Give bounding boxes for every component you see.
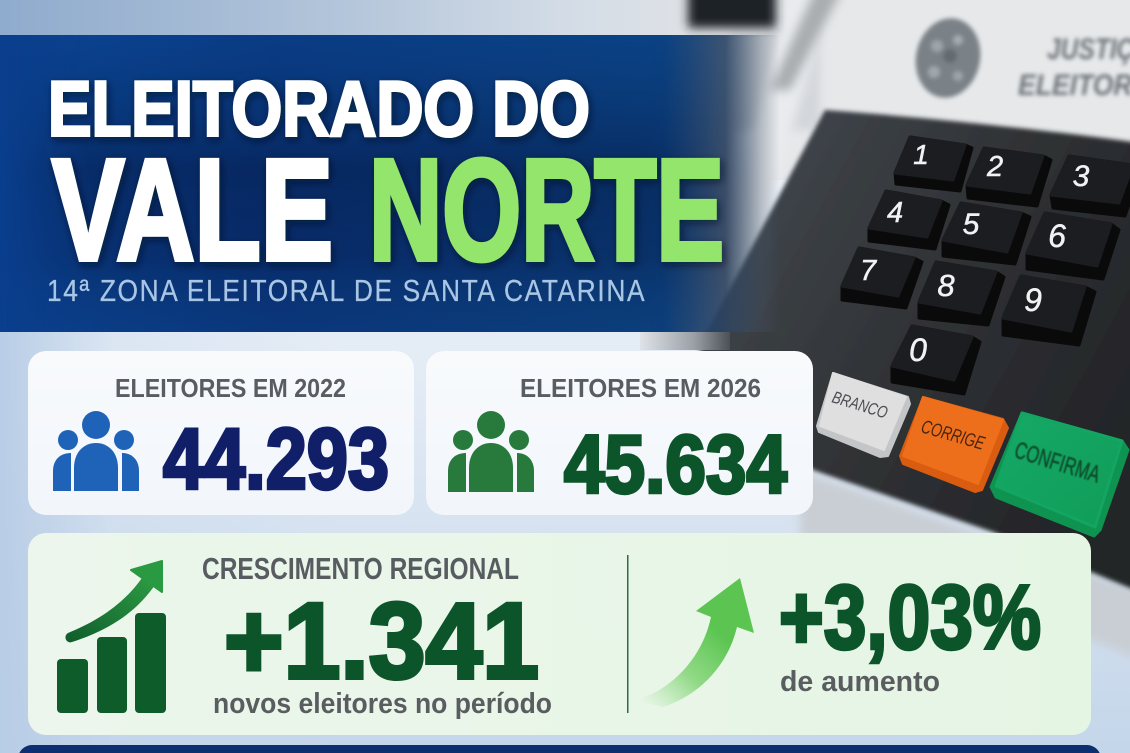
machine keypad body	[698, 110, 1130, 592]
panel: crescimento regional	[28, 533, 1091, 735]
icon: people blue	[53, 411, 139, 491]
emblem	[908, 12, 988, 104]
key 8	[919, 262, 1004, 325]
label 2026: ELEITORES EM 2026	[520, 373, 761, 403]
value 2022: 44.293	[163, 412, 389, 508]
value percent: +3,03%	[779, 568, 1041, 668]
key 3: 3	[1073, 160, 1090, 193]
title banner	[0, 35, 780, 350]
white surface below machine	[800, 470, 1130, 660]
button: corrige	[900, 397, 1008, 492]
key 6	[1027, 213, 1119, 279]
divider	[627, 555, 628, 713]
panel: eleitores 2026	[426, 351, 813, 515]
key 6: 6	[1048, 218, 1066, 254]
button: corrige: CORRIGE	[919, 417, 987, 455]
key 9	[1003, 276, 1095, 345]
bottom bar	[18, 745, 1101, 753]
key 5: 5	[963, 208, 980, 241]
label 2022: ELEITORES EM 2022	[115, 373, 346, 403]
key 4: 4	[887, 197, 903, 229]
casing label	[1018, 33, 1130, 102]
key 2: 2	[986, 151, 1003, 183]
key 1: 1	[913, 139, 929, 170]
title line 2: vale: VALE	[52, 130, 333, 290]
icon: growth chart	[57, 561, 166, 713]
machine upper casing	[688, 0, 1130, 340]
key 1	[895, 137, 972, 191]
subtitle: 14ª ZONA ELEITORAL DE SANTA CATARINA	[47, 274, 645, 309]
key 4	[869, 191, 949, 249]
caption aumento: de aumento	[780, 666, 940, 698]
key 9: 9	[1024, 282, 1042, 318]
icon: big arrow	[637, 578, 754, 707]
title line 2: norte: NORTE	[369, 130, 724, 290]
button: confirma	[991, 413, 1128, 536]
key 3	[1051, 156, 1130, 216]
photo: voting machine	[688, 0, 1130, 660]
value 2026: 45.634	[564, 418, 787, 510]
panel: eleitores 2022	[28, 351, 414, 515]
key 0: 0	[909, 332, 927, 368]
value +1.341: +1.341	[224, 580, 539, 701]
key 7: 7	[860, 255, 878, 287]
key 5	[943, 203, 1030, 264]
icon: people green	[448, 411, 534, 492]
title line 1: ELEITORADO DO	[48, 64, 590, 152]
key 0	[892, 326, 980, 394]
key 7	[842, 248, 922, 308]
heading: CRESCIMENTO REGIONAL	[202, 551, 519, 586]
key 8: 8	[937, 268, 955, 303]
button: branco: BRANCO	[830, 388, 890, 422]
button: branco	[817, 373, 910, 457]
caption: novos eleitores no período	[213, 688, 552, 720]
key 2	[967, 148, 1051, 206]
